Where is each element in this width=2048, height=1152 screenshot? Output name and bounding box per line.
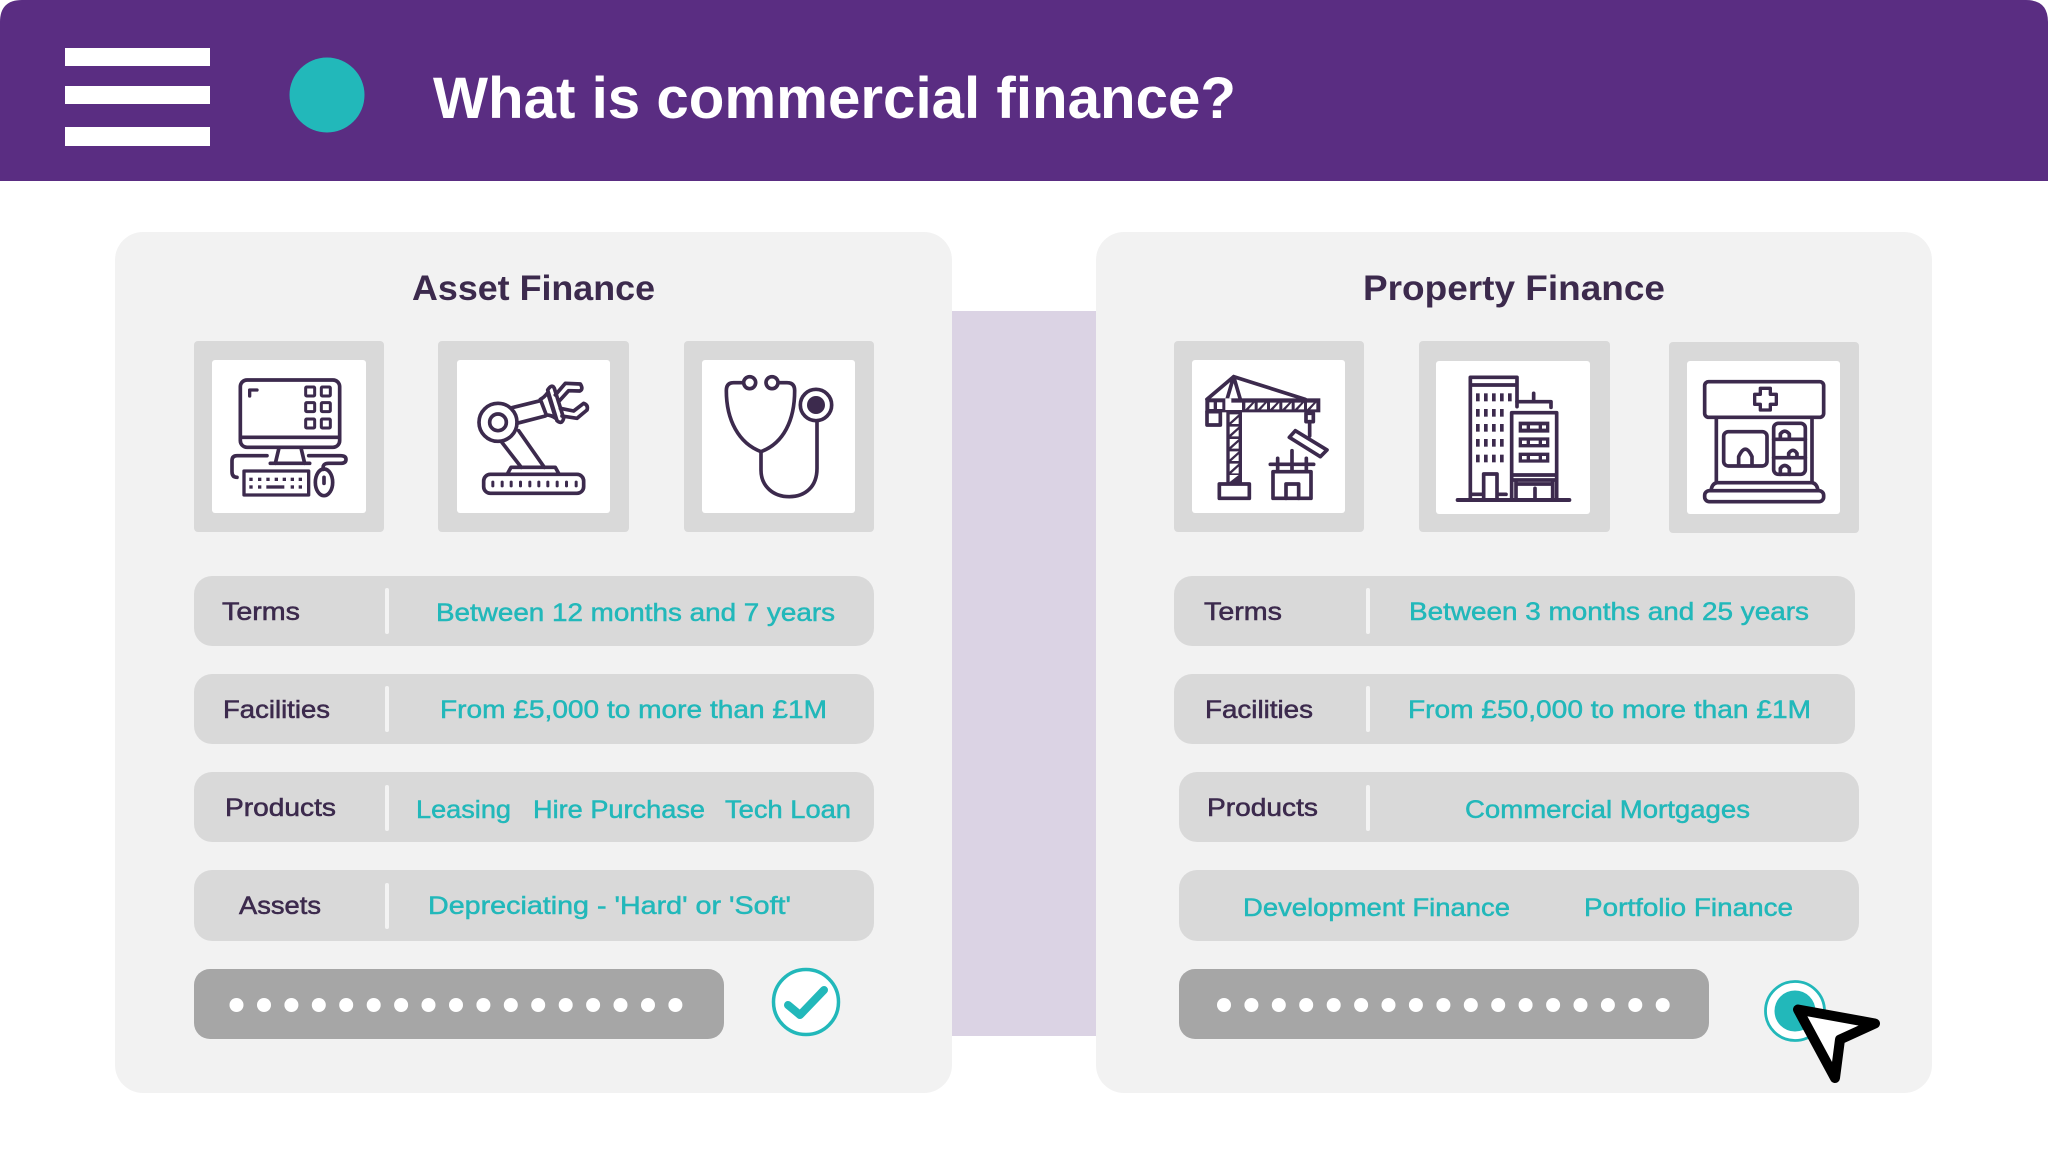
password field <box>194 969 724 1039</box>
row: products: Products <box>225 794 336 822</box>
icon: cursor <box>1798 1010 1875 1078</box>
row: products: Leasing <box>416 796 511 824</box>
row: more products: Portfolio Finance <box>1584 894 1793 922</box>
heading: property finance: Property Finance <box>1363 269 1665 308</box>
row: products: Commercial Mortgages <box>1465 796 1750 824</box>
tile: crane <box>1174 341 1364 532</box>
password field <box>1179 969 1709 1039</box>
row: terms <box>1174 576 1855 646</box>
tile: stethoscope <box>684 341 874 532</box>
heading: asset finance: Asset Finance <box>412 269 655 308</box>
header bar <box>0 0 2048 181</box>
row: terms: Between 3 months and 25 years <box>1409 598 1809 626</box>
connector band <box>940 311 1110 1036</box>
panel background <box>1096 232 1932 1093</box>
title: What is commercial finance? <box>433 66 1236 131</box>
panel: property finance <box>1096 232 1932 1093</box>
row: products: Hire Purchase <box>533 796 705 824</box>
row: facilities <box>1174 674 1855 744</box>
row: facilities <box>194 674 874 744</box>
row: products: Products <box>1207 794 1318 822</box>
row: facilities: From £50,000 to more than £1M <box>1408 696 1811 724</box>
row: products <box>1179 772 1859 842</box>
row: terms: Between 12 months and 7 years <box>436 599 835 627</box>
tile: computer <box>194 341 384 532</box>
icon: teal dot <box>290 58 364 132</box>
row: facilities: Facilities <box>223 696 330 724</box>
row: facilities: From £5,000 to more than £1M <box>440 696 827 724</box>
crane jib <box>1205 398 1320 412</box>
tile: robot arm <box>438 341 629 532</box>
tile: office buildings <box>1419 341 1610 532</box>
row: terms <box>194 576 874 646</box>
tile: pharmacy <box>1669 342 1859 533</box>
row: terms: Terms <box>1204 598 1282 626</box>
panel: asset finance <box>115 232 952 1093</box>
row: facilities: Facilities <box>1205 696 1313 724</box>
row: assets: Assets <box>239 892 321 920</box>
row: more products: Development Finance <box>1243 894 1510 922</box>
panel background <box>115 232 952 1093</box>
row: assets <box>194 870 874 941</box>
row: more products <box>1179 870 1859 941</box>
icon: menu <box>65 48 210 146</box>
row: products: Tech Loan <box>725 796 851 824</box>
header background <box>0 0 2048 181</box>
row: products <box>194 772 874 842</box>
row: terms: Terms <box>222 598 300 626</box>
row: assets: Depreciating - 'Hard' or 'Soft' <box>428 892 791 920</box>
crane tower <box>1226 412 1242 484</box>
icon: check button <box>774 970 838 1034</box>
icon: radio button <box>1766 982 1824 1040</box>
